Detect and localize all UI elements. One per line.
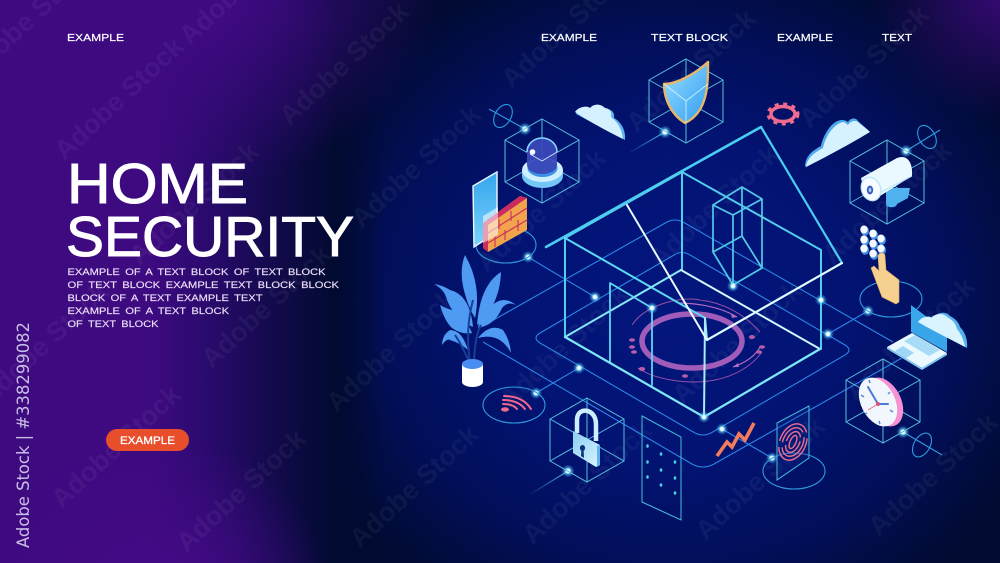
watermarks: Adobe Stock (862, 407, 1000, 542)
nav item 1: EXAMPLE (541, 32, 597, 44)
watermarks: Adobe Stock (816, 135, 958, 270)
button (106, 429, 189, 451)
icon: plant (434, 255, 516, 387)
icon: right cloud (805, 118, 870, 167)
vertical stock id: Adobe Stock | #338299082 (14, 322, 33, 548)
text block: BLOCK OF A TEXT EXAMPLE TEXT (68, 292, 263, 303)
icon: fingerprint panel (763, 406, 825, 489)
watermarks: Adobe Stock (48, 31, 190, 166)
watermarks: Adobe Stock (343, 419, 485, 554)
icon: pointing hand (871, 253, 899, 304)
icon: shield (664, 62, 708, 123)
watermarks: Adobe Stock (170, 423, 312, 558)
phone (473, 172, 497, 247)
watermarks: Adobe Stock (493, 279, 635, 414)
text block: OF TEXT BLOCK EXAMPLE TEXT BLOCK BLOCK (68, 279, 340, 290)
orbit icon: alarm (490, 101, 516, 131)
navigation (67, 32, 913, 44)
watermarks: Adobe Stock (345, 99, 487, 234)
text block (68, 266, 340, 329)
icon: keypad (860, 226, 886, 260)
floor edge highlight (565, 337, 820, 417)
brick wall (483, 196, 527, 252)
orbit icon: camera (914, 122, 940, 152)
watermarks: Adobe Stock (666, 275, 808, 410)
icon: laptop with cloud (887, 305, 967, 370)
door frame (610, 283, 652, 385)
clock cube (846, 359, 920, 443)
watermarks: Adobe Stock (45, 379, 187, 514)
icon: security camera (858, 157, 912, 207)
icon: clock (851, 371, 911, 442)
alarm cube (505, 119, 579, 203)
ring platform (629, 299, 765, 382)
nav item 4: TEXT (882, 32, 913, 44)
text block: EXAMPLE OF A TEXT BLOCK OF TEXT BLOCK (68, 266, 326, 277)
orbit icon: clock (909, 430, 935, 460)
icon: trend arrow (717, 423, 754, 456)
watermarks: Adobe Stock (689, 411, 831, 546)
connection nodes (518, 122, 912, 478)
watermarks: Adobe Stock (195, 239, 337, 374)
shield cube (649, 59, 723, 143)
door panel (642, 416, 681, 520)
icon: padlock (573, 411, 600, 467)
camera cube (850, 140, 924, 224)
house wireframe (546, 127, 842, 417)
glass overlay (483, 207, 498, 243)
watermarks: Adobe Stock (643, 139, 785, 274)
watermarks: Adobe Stock (516, 415, 658, 550)
text block: OF TEXT BLOCK (68, 318, 159, 329)
watermarks: Adobe Stock (793, 0, 935, 134)
title (66, 152, 354, 269)
title: HOME (67, 152, 248, 216)
nav brand: EXAMPLE (67, 32, 124, 44)
watermarks: Adobe Stock (123, 136, 265, 271)
roof (546, 127, 842, 340)
button: EXAMPLE (120, 435, 175, 447)
nav item 3: EXAMPLE (777, 32, 833, 44)
watermarks: Adobe Stock (273, 0, 415, 131)
icon: gear (768, 104, 798, 124)
watermarks: Adobe Stock (620, 3, 762, 138)
window box (713, 187, 762, 285)
icon: left cloud (575, 105, 625, 140)
nav item 2: TEXT BLOCK (651, 32, 728, 44)
watermarks: Adobe Stock (320, 283, 462, 418)
plant pot (462, 364, 483, 387)
watermarks: Adobe Stock (839, 271, 981, 406)
icon: wifi (483, 387, 545, 423)
title: SECURITY (66, 205, 354, 269)
text block: EXAMPLE OF A TEXT BLOCK (68, 305, 230, 316)
hand ring (860, 281, 922, 317)
walls (565, 172, 821, 417)
icon: phone and firewall (473, 172, 536, 263)
lock cube (550, 398, 624, 482)
icon: alarm light (522, 138, 563, 188)
floor circuit lines (483, 109, 942, 495)
watermarks: Adobe Stock (470, 143, 612, 278)
